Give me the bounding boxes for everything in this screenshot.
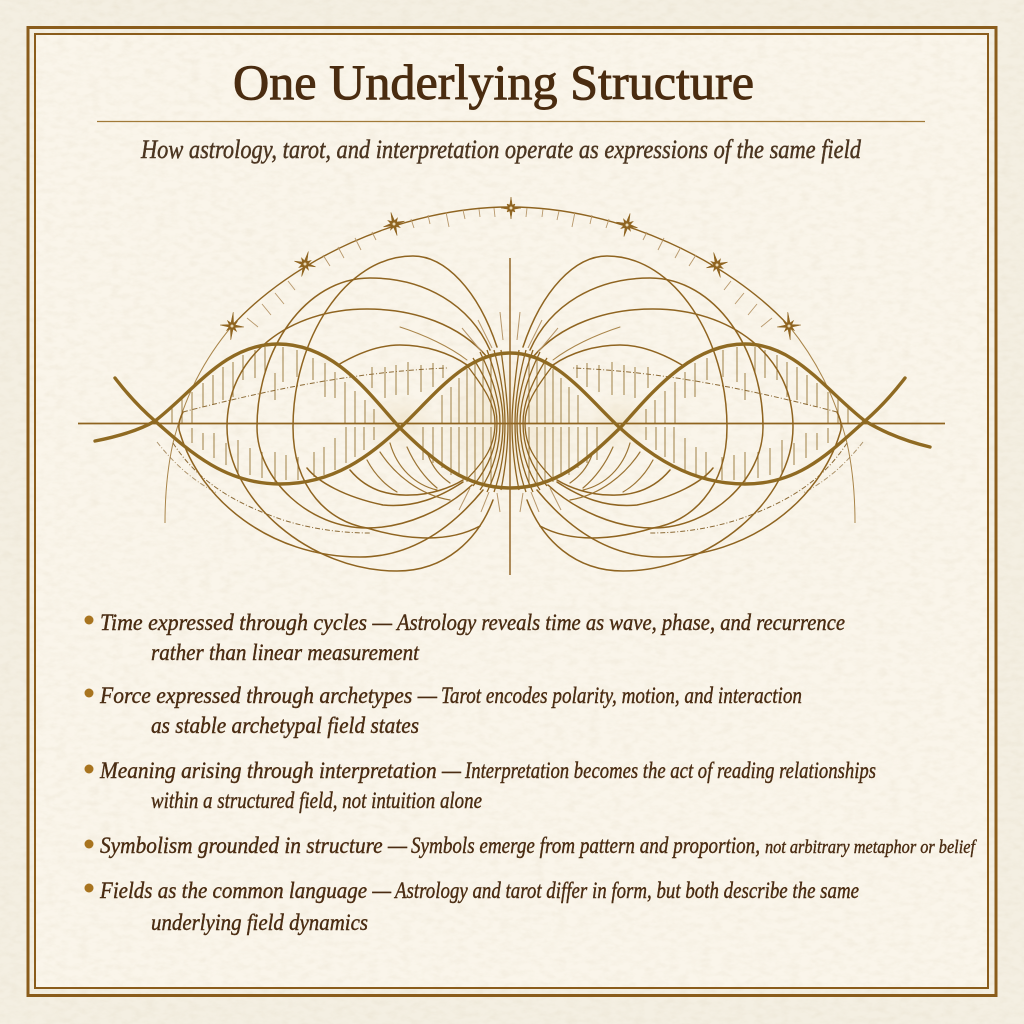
converging centre lines xyxy=(459,312,561,512)
centre and node glows xyxy=(360,353,660,493)
magnetic field lines: right lobe xyxy=(523,256,841,571)
bullet 2: as stable archetypal field states xyxy=(151,713,419,739)
vertical ticks under waves xyxy=(172,347,848,488)
title rule xyxy=(97,120,925,122)
stars xyxy=(219,197,802,341)
bullet 1: Astrology reveals time as wave, phase, and recurrence xyxy=(395,610,845,636)
title: One Underlying Structure xyxy=(233,54,754,110)
bullet 2 xyxy=(84,683,802,739)
bullet 4 xyxy=(84,833,977,859)
horizontal axis xyxy=(78,422,945,424)
bullet 1 xyxy=(84,610,845,666)
bullet 4: not arbitrary metaphor or belief xyxy=(765,837,977,858)
bullet 3: within a structured field, not intuition alone xyxy=(151,788,482,814)
bullet 5: Astrology and tarot differ in form, but both describe the same xyxy=(393,878,859,904)
bullet 5: Fields as the common language — xyxy=(99,878,392,904)
bullet 4: Symbolism grounded in structure — xyxy=(100,833,408,859)
bullet 3: Meaning arising through interpretation — xyxy=(99,758,462,784)
bullet 1: rather than linear measurement xyxy=(151,640,419,666)
subtitle: How astrology, tarot, and interpretation operate as expressions of the same field xyxy=(140,135,862,164)
bullet 3: Interpretation becomes the act of reading relationships xyxy=(464,758,876,784)
bullet 5 xyxy=(84,878,859,936)
sine wave two xyxy=(95,344,930,488)
celestial arc with stars xyxy=(165,197,855,523)
bullet 4: Symbols emerge from pattern and proportion, xyxy=(411,833,760,859)
bullet 3 xyxy=(84,758,876,814)
bullet list xyxy=(84,610,977,936)
bullet 5: underlying field dynamics xyxy=(151,910,368,936)
magnetic field lines: left lobe xyxy=(179,256,497,571)
vertical axis xyxy=(509,258,511,575)
sine wave one xyxy=(115,353,905,484)
field diagram xyxy=(78,197,945,575)
bullet 2: Tarot encodes polarity, motion, and interaction xyxy=(441,683,802,709)
dashed orbit curves xyxy=(157,368,863,533)
bullet 1: Time expressed through cycles — xyxy=(100,610,393,636)
bullet 2: Force expressed through archetypes — xyxy=(99,683,438,709)
